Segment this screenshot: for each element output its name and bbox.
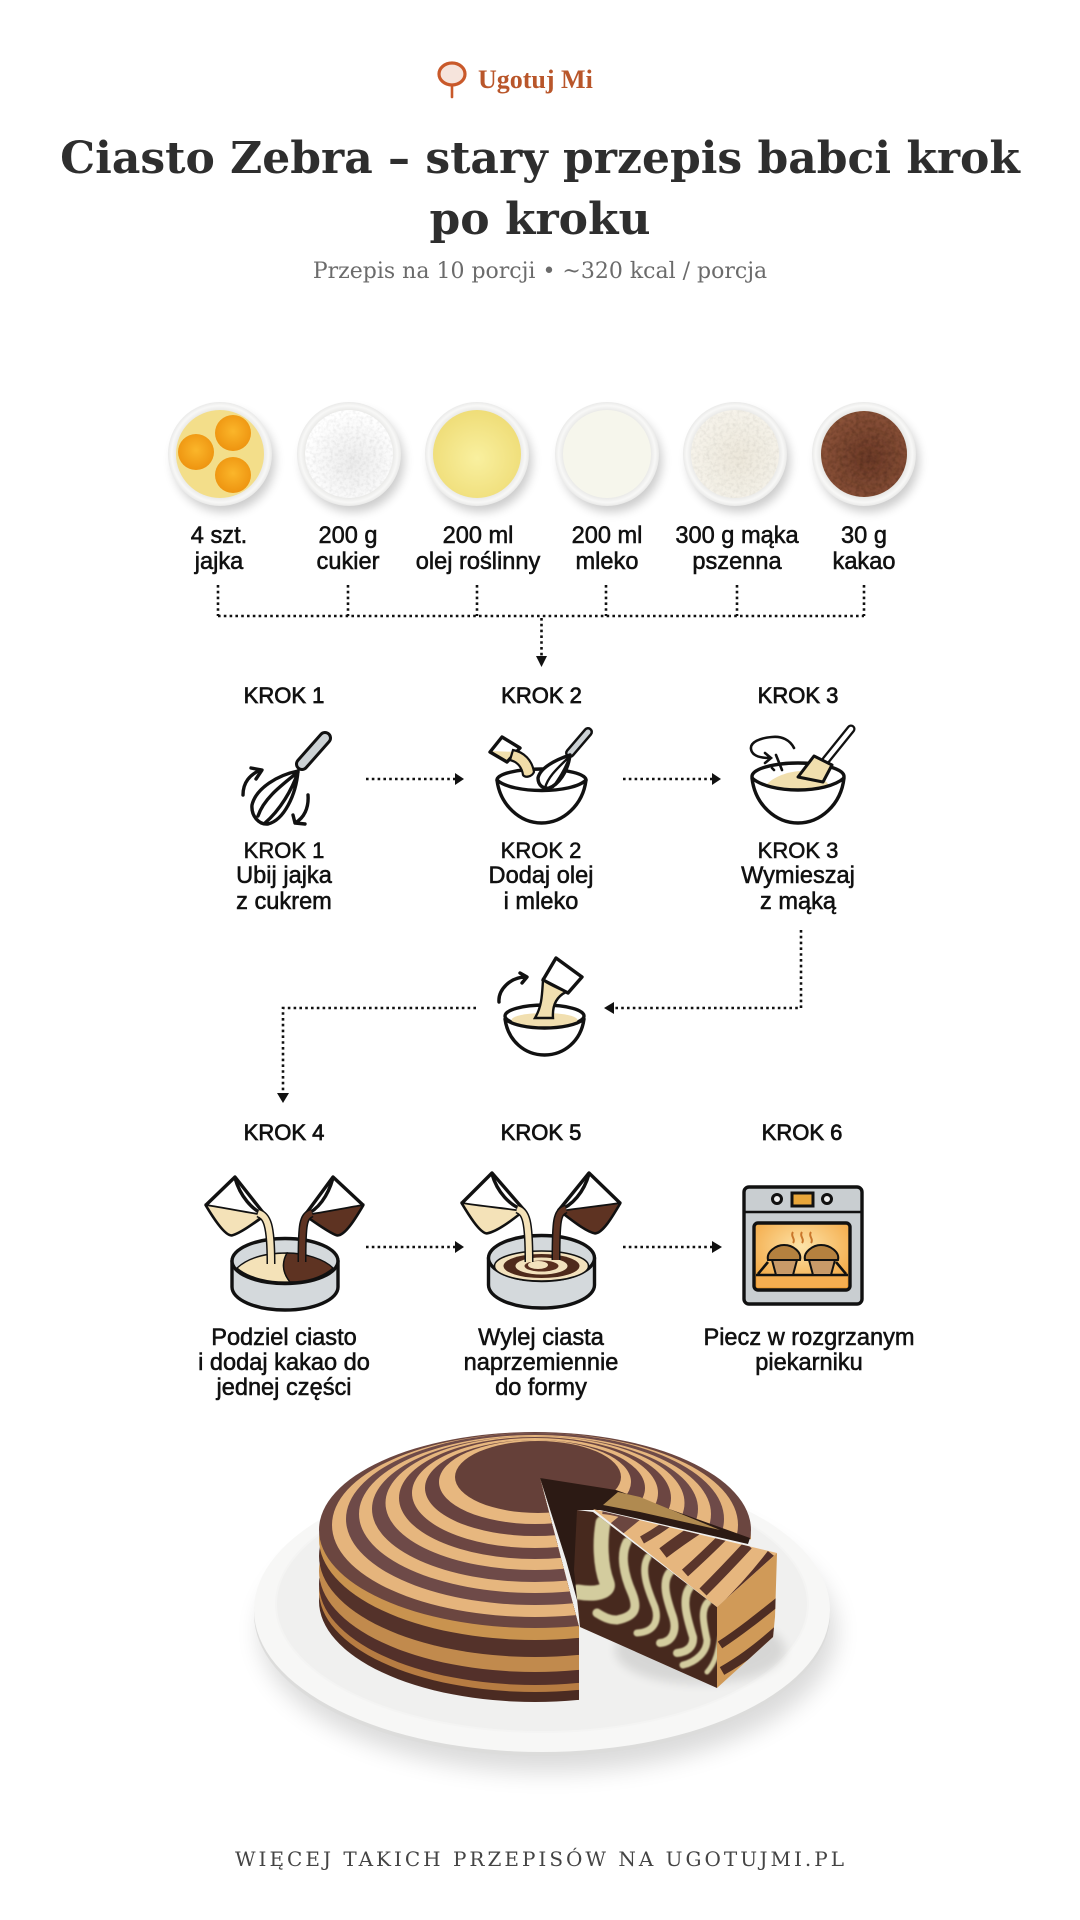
arrow: ingredients converge to step 1 row — [218, 585, 864, 667]
step 2 caption: KROK 2 — [501, 838, 581, 863]
ingredient: sugar — [297, 402, 404, 512]
step 1 caption: KROK 1 — [244, 838, 324, 863]
step 6 caption: Piecz w rozgrzanym — [703, 1325, 915, 1351]
icon: batter bowl with measuring cup — [499, 958, 584, 1055]
step 6 caption: piekarniku — [755, 1350, 863, 1376]
step 3 caption: z mąką — [760, 889, 837, 915]
ingredient label: cocoa: kakao — [833, 549, 895, 575]
step 3 caption: Wymieszaj — [741, 863, 855, 889]
arrow: batter bowl to step 4 — [277, 1008, 476, 1103]
footer: WIĘCEJ TAKICH PRZEPISÓW NA UGOTUJMI.PL — [235, 1846, 847, 1871]
step 5 caption: Wylej ciasta — [478, 1325, 605, 1351]
cake body — [319, 1432, 751, 1702]
step 5 caption: naprzemiennie — [464, 1350, 618, 1376]
ingredient label: oil: 200 ml — [443, 523, 513, 549]
subtitle: Przepis na 10 porcji • ~320 kcal / porcja — [313, 259, 767, 284]
icon: spoon logo — [439, 63, 465, 97]
step 1 caption: Ubij jajka — [236, 863, 333, 889]
cake cut interior — [540, 1478, 750, 1600]
title: Ciasto Zebra – stary przepis babci krok — [60, 133, 1021, 184]
step 3 heading: KROK 3 — [758, 683, 838, 708]
step 6 heading: KROK 6 — [762, 1120, 842, 1145]
ingredient label: flour: 300 g mąka — [675, 523, 800, 549]
ingredient: milk — [555, 402, 662, 512]
step 2 caption: Dodaj olej — [489, 863, 593, 889]
title: po kroku — [430, 194, 650, 245]
icon: pan with concentric batter — [462, 1173, 620, 1308]
icon: bowl with oil and whisk — [490, 732, 588, 823]
logo — [439, 63, 593, 97]
arrow: step 3 down to batter bowl — [604, 930, 801, 1014]
ingredient: cocoa — [812, 402, 919, 512]
ingredient label: milk: 200 ml — [572, 523, 642, 549]
ingredient label: sugar: cukier — [317, 549, 380, 575]
ingredient label: milk: mleko — [576, 549, 638, 575]
ingredient: oil — [425, 402, 532, 512]
arrow: step 1 to step 2 — [366, 773, 464, 785]
ingredient label: flour: pszenna — [692, 549, 782, 575]
step 4 caption: jednej części — [215, 1375, 352, 1401]
step 5 caption: do formy — [495, 1375, 587, 1401]
step 4 heading: KROK 4 — [244, 1120, 324, 1145]
ingredient: eggs — [168, 402, 275, 512]
slice of cake — [574, 1506, 780, 1688]
icon: whisk — [243, 738, 325, 824]
icon: bowl with spatula — [751, 729, 851, 823]
icon: pan with two batters — [206, 1177, 363, 1310]
arrow: step 2 to step 3 — [623, 773, 721, 785]
ingredient label: oil: olej roślinny — [416, 549, 540, 575]
ingredient: flour — [683, 402, 790, 512]
step 2 caption: i mleko — [504, 889, 578, 915]
step 3 caption: KROK 3 — [758, 838, 838, 863]
arrow: step 4 to step 5 — [366, 1241, 464, 1253]
step 1 caption: z cukrem — [236, 889, 332, 915]
plate — [254, 1468, 836, 1772]
panel: ingredients — [168, 402, 919, 575]
illustration: zebra cake on plate — [254, 1432, 836, 1772]
step 4 caption: i dodaj kakao do — [198, 1350, 370, 1376]
ingredient label: sugar: 200 g — [318, 523, 378, 549]
arrow: step 5 to step 6 — [623, 1241, 722, 1253]
step 2 heading: KROK 2 — [501, 683, 582, 708]
ingredient label: eggs: 4 szt. — [191, 523, 247, 549]
step 5 heading: KROK 5 — [501, 1120, 581, 1145]
step 4 caption: Podziel ciasto — [211, 1325, 357, 1351]
ingredient label: eggs: jajka — [194, 549, 244, 575]
step 1 heading: KROK 1 — [244, 683, 324, 708]
brand name: Ugotuj Mi — [478, 65, 593, 94]
icon: oven — [744, 1187, 862, 1304]
ingredient label: cocoa: 30 g — [841, 523, 887, 549]
